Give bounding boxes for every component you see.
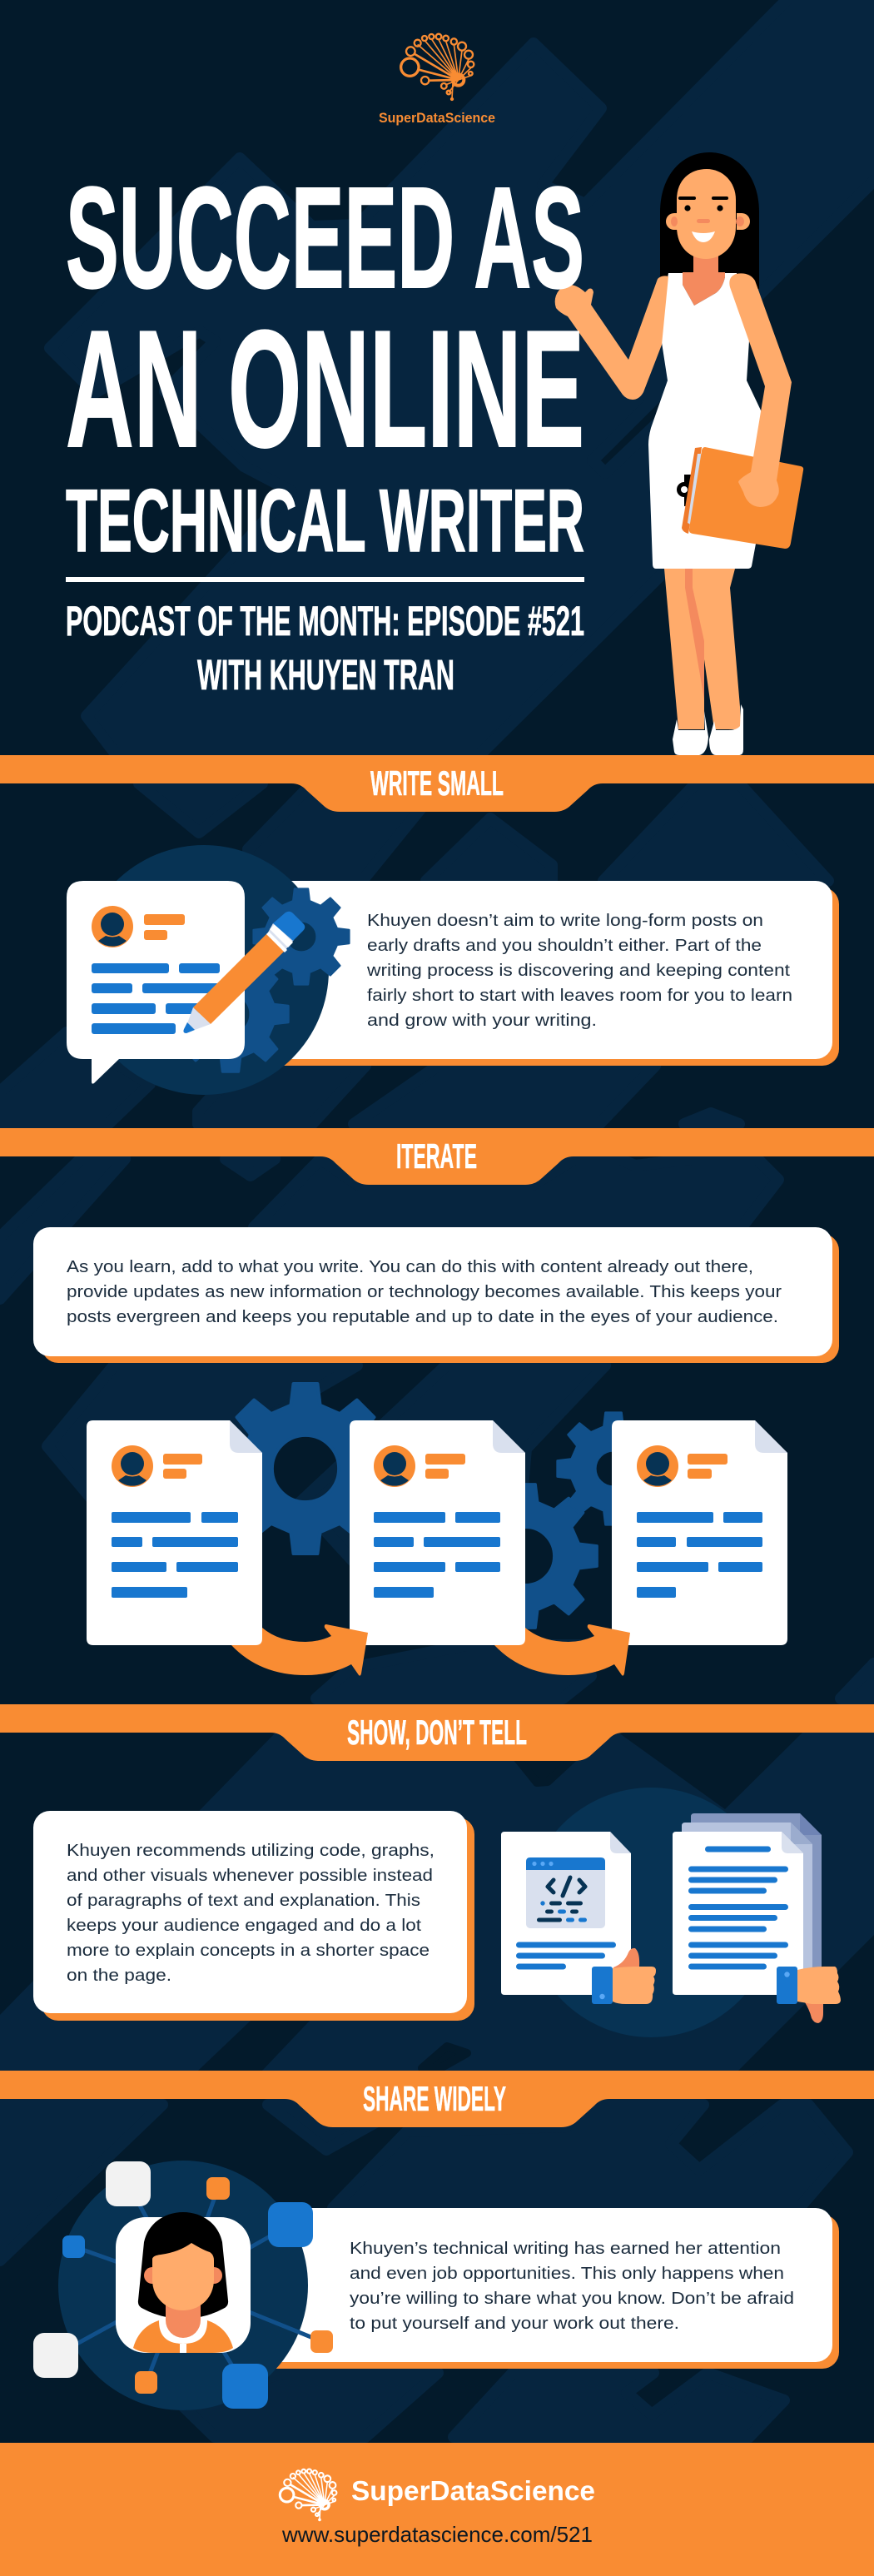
header band: show, don't tell: [0, 1704, 874, 1761]
footer wordmark: SuperDataScience: [351, 2475, 595, 2506]
text block: more to explain concepts in a shorter space: [67, 1942, 430, 1960]
card shadow: [42, 1234, 839, 1363]
text block: you’re willing to share what you know. Don’t be afraid: [350, 2290, 794, 2308]
document 2: [350, 1420, 525, 1645]
icon: brain network white: [280, 2469, 336, 2520]
text block: posts evergreen and keeps you reputable and up to date in the eyes of your audience.: [67, 1308, 778, 1326]
panel: write small: [67, 845, 839, 1095]
text block: writing process is discovering and keeping content: [366, 962, 790, 980]
network nodes: [33, 2161, 333, 2409]
gear: large: [221, 1384, 390, 1554]
text lines: [688, 1847, 788, 1970]
shirt: [133, 2320, 233, 2353]
code window: [526, 1857, 605, 1928]
text block: Khuyen recommends utilizing code, graphs,: [67, 1842, 435, 1860]
text block: provide updates as new information or technology becomes available. This keeps your: [67, 1283, 782, 1301]
header band: share widely: [0, 2071, 874, 2127]
subtitle: [66, 598, 584, 699]
gear: lower right: [454, 1484, 597, 1628]
header band: write small: WRITE SMALL: [370, 763, 504, 803]
icon: thumbs up: [592, 1948, 656, 2004]
network backdrop circle: [58, 2161, 308, 2410]
text block: fairly short to start with leaves room for you to learn: [367, 987, 792, 1005]
document with code: [501, 1832, 631, 1995]
icon backdrop circle: [526, 1788, 776, 2037]
face: [677, 169, 736, 259]
panel: show, don't tell: [33, 1788, 841, 2037]
document 3: [612, 1420, 787, 1645]
card shadow: [42, 1818, 474, 2021]
background dark stripes: [198, 1733, 802, 2071]
text block: on the page.: [67, 1967, 171, 1985]
header band: write small: [0, 755, 874, 812]
icon: upper gear: [254, 889, 349, 984]
leg shadow: [685, 569, 704, 699]
panel: hero: [66, 34, 803, 755]
stacked long document: [673, 1813, 822, 1995]
text bars: [92, 963, 225, 1034]
text block: of paragraphs of text and explanation. This: [67, 1892, 420, 1910]
card: [241, 881, 832, 1059]
icon: lower gear: [173, 957, 288, 1072]
text block: to put yourself and your work out there.: [350, 2315, 679, 2333]
right arm: [729, 273, 792, 507]
left arm: [555, 276, 668, 400]
header band: iterate: [0, 1128, 874, 1185]
hair: [660, 152, 759, 289]
header band: iterate: ITERATE: [396, 1136, 477, 1176]
text block: [67, 1258, 782, 1326]
ears: [666, 213, 750, 230]
text block: and even job opportunities. This only happens when: [350, 2265, 784, 2283]
text block: early drafts and you shouldn’t either. Part of the: [367, 937, 762, 955]
logo wordmark: SuperDataScience: [379, 110, 495, 126]
card shadow: [258, 888, 839, 1066]
network connector lines: [56, 2184, 321, 2386]
panel: iterate: [33, 1227, 839, 1676]
front page: [673, 1832, 803, 1995]
neck: [166, 2298, 201, 2338]
footer url: www.superdatascience.com/521: [281, 2522, 593, 2547]
icon: pencil: [183, 912, 305, 1033]
clip: [677, 475, 693, 506]
clipboard: [677, 447, 803, 549]
text block: [366, 912, 792, 1030]
header band: show, don't tell: SHOW, DON’T TELL: [347, 1713, 527, 1752]
shoes: [673, 704, 743, 755]
text block: Khuyen doesn’t aim to write long-form posts on: [367, 912, 763, 930]
logo: SuperDataScience top: [379, 34, 495, 126]
back pages: [691, 1813, 822, 1982]
card: [241, 2208, 832, 2362]
avatar: [92, 906, 133, 947]
panel: share widely: [33, 2161, 839, 2410]
name bars: [144, 914, 185, 940]
text lines: [516, 1942, 616, 1970]
footer: [0, 2443, 874, 2576]
arrow 2: [494, 1624, 630, 1676]
neck and chest: [683, 254, 725, 306]
collar: [159, 2320, 207, 2353]
title: [66, 157, 584, 570]
ears: [144, 2267, 222, 2284]
text block: and other visuals whenever possible instead: [67, 1867, 433, 1885]
hair: [138, 2212, 228, 2317]
text block: and grow with your writing.: [367, 1012, 597, 1030]
card: [33, 1811, 467, 2013]
subtitle: WITH KHUYEN TRAN: [197, 651, 454, 699]
gear: upper right: [558, 1413, 669, 1524]
illustration: woman with clipboard: [555, 152, 803, 755]
card: [33, 1227, 832, 1356]
text block: [67, 1842, 435, 1985]
arrow 1: [231, 1624, 368, 1676]
icon backdrop circle: [79, 845, 329, 1095]
icon: document speech bubble: [67, 881, 245, 1084]
text block: [350, 2240, 794, 2333]
face: [152, 2243, 214, 2310]
legs: [664, 569, 741, 729]
title divider: [66, 577, 584, 582]
text block: As you learn, add to what you write. You can do this with content already out there,: [67, 1258, 753, 1276]
facial features: [671, 196, 744, 242]
text block: keeps your audience engaged and do a lot: [67, 1917, 421, 1935]
dress: [648, 273, 762, 569]
header band: share widely: SHARE WIDELY: [363, 2079, 506, 2118]
card shadow: [250, 2215, 839, 2369]
icon: thumbs down: [777, 1967, 841, 2023]
portrait: [116, 2212, 251, 2353]
icon: brain network: [401, 34, 474, 100]
text block: Khuyen’s technical writing has earned her attention: [350, 2240, 781, 2258]
document 1: [87, 1420, 262, 1645]
